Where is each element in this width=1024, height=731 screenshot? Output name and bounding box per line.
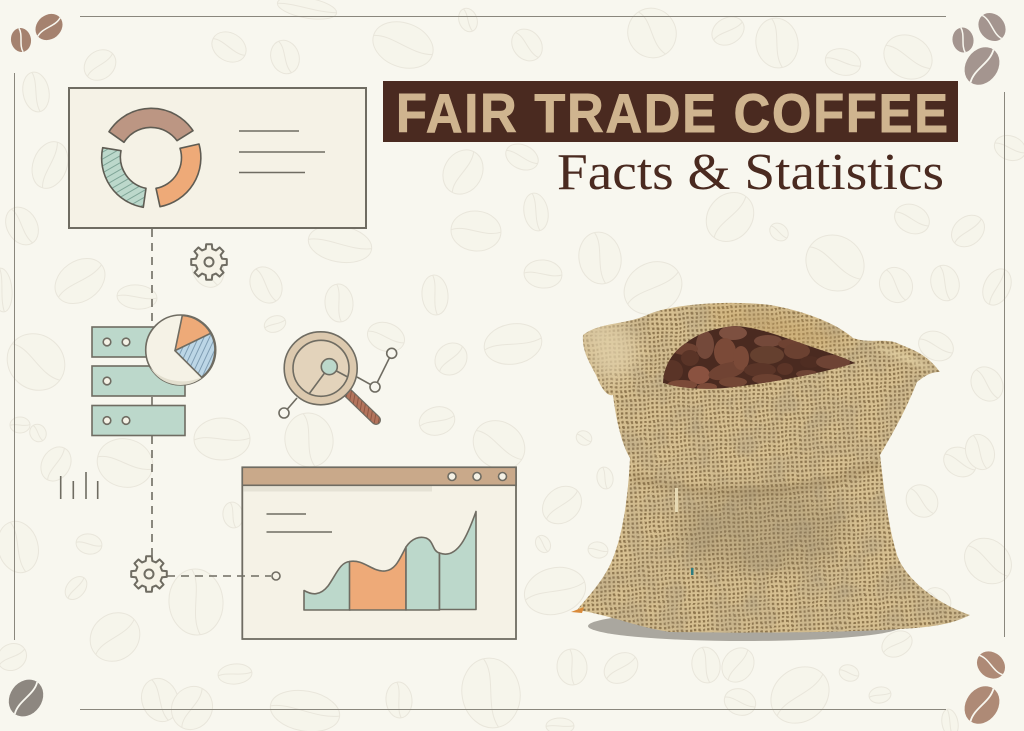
icon: gear lower (131, 556, 167, 592)
sack body (570, 295, 980, 640)
orange fiber (571, 607, 584, 613)
subtitle: Facts & Statistics (557, 144, 944, 201)
text lines (266, 514, 332, 532)
server stack (92, 327, 185, 436)
window shadow (244, 485, 432, 492)
dashed connector to node (167, 575, 271, 577)
icon: coffee beans top right (950, 7, 1011, 92)
icon: coffee beans bottom right (957, 646, 1011, 731)
connector end node (272, 572, 280, 580)
teal fleck (691, 568, 694, 575)
window buttons (448, 472, 506, 480)
donut chart (102, 108, 201, 207)
title: banner: FAIR TRADE COFFEE (396, 83, 948, 144)
burlap sack of coffee beans (570, 295, 980, 640)
panel: donut chart card (69, 88, 366, 228)
legend lines (239, 131, 325, 172)
icon: coffee beans top left (9, 8, 68, 54)
dashed connector lines (151, 229, 153, 558)
loose pale strand (675, 488, 678, 512)
icon: coffee bean bottom left (2, 673, 50, 723)
icon: gear upper (191, 244, 227, 280)
ground shadow under sack (588, 611, 902, 641)
area chart (304, 512, 476, 610)
mini bar ticks (61, 472, 98, 499)
panel: area chart window (242, 467, 516, 639)
window header bar (242, 467, 516, 485)
icon: magnifying glass with nodes (279, 332, 397, 420)
sack mouth and beans (663, 326, 855, 389)
pie chart (146, 315, 216, 385)
